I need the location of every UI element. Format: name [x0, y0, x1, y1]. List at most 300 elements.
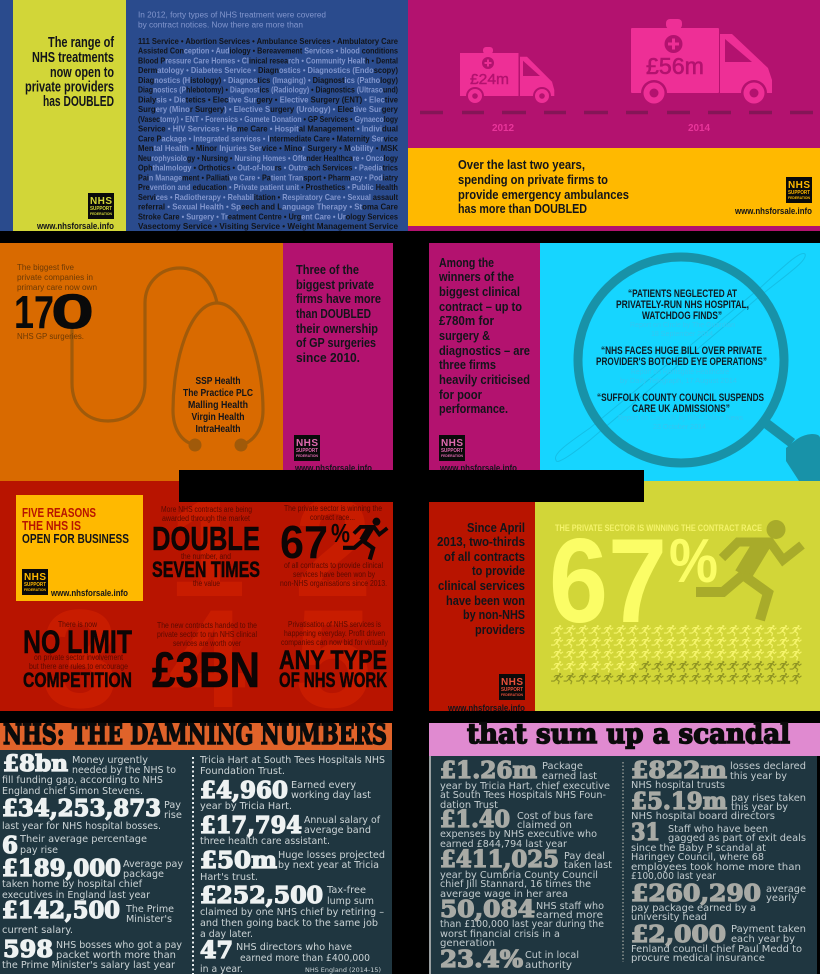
- stat: 47: 47: [200, 937, 233, 964]
- stat: 411,025: £411,025: [440, 846, 559, 873]
- headline: patients neglected: [616, 288, 749, 338]
- heading: treatments doubled: now open to: [50, 65, 114, 81]
- headline: botched eye operations: “NHS FACES HUGE BILL OVER PRIVATE: [601, 345, 762, 357]
- cell: any type: [279, 620, 388, 692]
- logo: NHS: [296, 438, 318, 449]
- panel: the damning numbers: [0, 718, 392, 974]
- intro text: by contract notices. Now there are more than: [138, 20, 303, 30]
- stat: 411,025: chief Jill Stannard, 16 times the: [440, 879, 591, 890]
- stat: 1.26m: at South Tees Hospitals NHS Foun-: [440, 790, 606, 801]
- stat: 5.19m: this year by: [731, 802, 788, 813]
- stat: 6: [2, 832, 147, 859]
- title card: www.nhsforsale.info: [50, 588, 128, 598]
- text: ownership doubled: than DOUBLED: [296, 306, 371, 321]
- stat: 1.40: £1.40: [440, 806, 510, 833]
- list of treatments: Mental Health • Minor Injuries Service • Minor Surgery • Mobility • MSK: [138, 143, 399, 153]
- text: clinical contract winners: winners of the: [438, 269, 514, 284]
- stat: 2,000: Payment taken: [731, 924, 806, 935]
- stat: 2,000: Fenland council chief Paul Medd to: [631, 944, 802, 955]
- text: clinical contract winners: surgery &: [439, 328, 490, 343]
- stat: 170: 17: [14, 286, 54, 338]
- stat: 6: pay rise: [20, 845, 58, 856]
- cell: 67 percent: [280, 504, 387, 588]
- stat: 8bn: Money urgently: [72, 755, 148, 766]
- list of treatments: Prevention and education • Private patient unit • Prosthetics • Public Health: [138, 182, 398, 192]
- list of treatments: Assisted Conception • Audiology • Bereavement Services • blood conditions: [138, 46, 398, 56]
- stat: 142,500: The Prime: [125, 904, 174, 915]
- stat: 822m: losses declared: [730, 761, 806, 772]
- stat: 8bn: fill funding gap, according to NHS: [2, 775, 163, 786]
- title card: FEDERATION: [24, 587, 46, 592]
- headline: care home admissions: “SUFFOLK COUNTY COUNCIL SUSPENDS: [597, 392, 764, 404]
- list of treatments: [138, 36, 399, 231]
- stat: 260,290: average: [766, 884, 806, 895]
- stat: 260,290: [631, 880, 806, 923]
- ghost numerals: 4: [168, 580, 246, 737]
- text: clinical contract winners: £780m for: [439, 313, 494, 328]
- stat: 34,253,873: £34,253,873: [2, 795, 161, 822]
- panel: poor performance: [429, 243, 820, 481]
- cell: double: More NHS contracts are being: [161, 505, 252, 514]
- list: private firms: The Practice PLC: [183, 387, 253, 399]
- label: 2014: 2014: [688, 123, 710, 134]
- logo: FEDERATION: [501, 692, 523, 697]
- stat: 822m: NHS hospital trusts: [631, 780, 725, 791]
- stat: 50,084: than £100,000 last year during the: [440, 919, 604, 930]
- stat: 598: the Prime Minister's salary last year: [2, 960, 175, 971]
- text: ownership doubled: of GP surgeries: [296, 335, 376, 350]
- stat: 411,025: year by Cumbria County Council: [440, 870, 598, 881]
- list of treatments: Pain Management • Palliative Care • Patient Transport • Pharmacy • Podiatry: [138, 172, 398, 182]
- band: spending statement: [408, 148, 820, 226]
- text: clinical contract winners: heavily criticised: [439, 372, 530, 387]
- stat: 598: [2, 936, 182, 971]
- text: biggest five: NHS GP surgeries.: [17, 332, 84, 341]
- logo: FEDERATION: [441, 453, 463, 458]
- text: biggest five: The biggest five: [17, 263, 75, 272]
- stat: 411,025: average wage in her area: [440, 889, 568, 900]
- stat: 252,500: £252,500: [200, 882, 323, 909]
- list of treatments: Care Package • Integrated services • Intermediate Care • Maternity Service: [138, 133, 398, 143]
- stat: 34,253,873: Pay: [164, 800, 181, 811]
- text: two-thirds of contracts: [437, 520, 525, 637]
- heading: treatments doubled: NHS treatments: [32, 50, 114, 66]
- band: spending statement: NHS: [788, 180, 810, 191]
- divider: [622, 762, 624, 962]
- list: private firms: SSP Health: [196, 375, 240, 387]
- ghost numerals: [41, 469, 372, 737]
- black row masks: [0, 231, 820, 723]
- band: spending statement: Over the last two years,: [458, 158, 585, 172]
- text: ownership doubled: their ownership: [296, 321, 378, 336]
- stat: 47: NHS directors who have: [236, 942, 352, 953]
- heading: NHS: THE DAMNING NUMBERS: [3, 718, 387, 751]
- text: ownership doubled: [296, 262, 381, 365]
- cell: double: [152, 505, 260, 588]
- stat: 1.26m: Package: [542, 761, 583, 772]
- list of treatments: Surgery (Minor Surgery) • Elective Surgery (Urology) • Elective Surgery: [138, 104, 398, 114]
- stat: 252,500: [200, 882, 384, 940]
- list of treatments: Diagnostics (Phlebotomy) • Diagnostics (Radiology) • Diagnostics (Ultrasound): [138, 85, 398, 95]
- stat: 4,960: £4,960: [200, 777, 288, 804]
- stat: 822m: [631, 757, 806, 791]
- text: ownership doubled: since 2010.: [296, 350, 360, 365]
- stat: 5.19m: NHS hospital board directors: [631, 811, 775, 822]
- stat: 34,253,873: last year for NHS hospital bosses.: [2, 821, 161, 832]
- band: spending statement: SUPPORT: [788, 190, 810, 196]
- heading: that sum up a scandal: [467, 719, 790, 750]
- stat: 34,253,873: rise: [164, 810, 182, 821]
- logo: NHS: [441, 438, 463, 449]
- stat: 142,500: current salary.: [2, 925, 73, 936]
- text: two-thirds of contracts: providers: [475, 622, 525, 637]
- stat: 411,025: taken last: [564, 860, 612, 871]
- stat: 50m: Hart's trust.: [200, 872, 258, 883]
- list: private firms: IntraHealth: [196, 423, 240, 435]
- stat: 23.4 percent: Cut in local: [525, 950, 579, 961]
- logo: [294, 435, 320, 461]
- stat: 8bn: [2, 751, 176, 797]
- stat: 17,794: average band: [304, 825, 371, 836]
- panel: contract race: [429, 481, 820, 713]
- road: [420, 111, 813, 114]
- stat: 260,290: £260,290: [631, 880, 761, 907]
- logo: NHS: [90, 196, 112, 207]
- caption: contract race: THE PRIVATE SECTOR IS WINNING THE CONTRACT RACE: [555, 523, 762, 534]
- stat: 5.19m: pay rises taken: [731, 793, 806, 804]
- stat: 67 percent: %: [669, 527, 718, 596]
- title card: SUPPORT: [24, 582, 46, 588]
- icon: small ambulance 2012: [460, 47, 554, 105]
- stat: 50,084: generation: [440, 938, 495, 949]
- ghost numerals: 2: [294, 469, 372, 626]
- stat: 189,000: executives in England last year: [2, 890, 150, 901]
- cell: double: the number, and: [181, 552, 231, 561]
- stat: 170: [14, 286, 92, 338]
- website link: www.nhsforsale.info: [36, 221, 114, 231]
- pictogram: 100 runners, 67 highlighted: [551, 625, 802, 685]
- cell: 67 percent: The private sector is winning the: [284, 504, 382, 513]
- band: spending statement: has more than DOUBLED: [458, 202, 587, 216]
- stat: 31: gagged as part of exit deals: [668, 833, 806, 844]
- stat: 2,000: procure medical insurance: [631, 953, 765, 964]
- intro text: [138, 10, 326, 30]
- cell: double: SEVEN TIMES: [152, 557, 260, 582]
- stat: 31: Haringey Council, where 68: [631, 852, 764, 863]
- cell: no limit: NO LIMIT: [23, 624, 132, 660]
- stat: 1.26m: [440, 757, 610, 811]
- list of treatments: 111 Service • Abortion Services • Ambulance Services • Ambulatory Care: [138, 36, 398, 46]
- stat: 23.4 percent: authority: [525, 960, 572, 971]
- cell: no limit: There is now: [58, 620, 97, 629]
- stat: 31: 31: [631, 819, 660, 846]
- logo: FEDERATION: [296, 453, 318, 458]
- stat: 31: £100,000 last year: [631, 871, 716, 882]
- text: clinical contract winners: biggest clinical: [439, 284, 520, 299]
- stat: 2,000: [631, 921, 806, 964]
- text: biggest five: [17, 263, 97, 341]
- stat: 31: employees took home more than: [631, 862, 801, 873]
- stat: 23.4 percent: [440, 946, 579, 973]
- logo: [88, 193, 114, 219]
- title card: NHS: [24, 572, 46, 583]
- list of treatments: Services • Radiotherapy • Rehabilitation • Respiratory Care • Sexual assault: [138, 192, 398, 202]
- source note: NHS England (2014-15): [305, 966, 381, 974]
- stat: 17,794: three health care assistant.: [200, 836, 330, 847]
- headline: patients neglected: “PATIENTS NEGLECTED AT: [628, 288, 737, 300]
- heading: treatments doubled: has DOUBLED: [43, 94, 114, 110]
- headline: patients neglected: PRIVATELY-RUN NHS HOSPITAL,: [616, 299, 749, 311]
- stat: 252,500: a day later.: [200, 929, 253, 940]
- cell: no limit: COMPETITION: [23, 669, 132, 692]
- list of treatments: Stroke Care • Surgery • Treatment Centre • Urgent Care • Urology Services: [138, 211, 398, 221]
- stat: 47: [200, 937, 370, 974]
- icon: large ambulance 2014: £56m: [646, 53, 704, 79]
- stat: 50,084: earned more: [536, 910, 603, 921]
- band: spending statement: spending on private firms to: [458, 173, 608, 187]
- stat: 1.40: [440, 806, 597, 850]
- list: private firms: Virgin Health: [192, 411, 244, 423]
- text: two-thirds of contracts: have been won: [446, 593, 525, 608]
- stat: 252,500: and then going back to the same job: [200, 918, 378, 929]
- stat: 1.26m: dation Trust: [440, 800, 498, 811]
- text: two-thirds of contracts: 2013, two-thirds: [437, 534, 525, 549]
- cell: 3bn: £3BN: [152, 642, 260, 698]
- heading: treatments doubled: [25, 35, 114, 110]
- stat: 260,290: pay package earned by a: [631, 903, 756, 914]
- headline: care home admissions: CARE UK ADMISSIONS”: [632, 403, 730, 415]
- cell: 67 percent: contract race...: [310, 513, 355, 522]
- cell: any type: OF NHS WORK: [279, 669, 387, 692]
- text: two-thirds of contracts: Since April: [467, 520, 525, 535]
- website link: www.nhsforsale.info: [294, 463, 372, 473]
- heading: treatments doubled: private providers: [25, 80, 114, 96]
- text: clinical contract winners: diagnostics – are: [439, 343, 530, 358]
- stat: 1.40: expenses by NHS executive who: [440, 829, 597, 840]
- text: Tricia Hart continuation: [199, 755, 385, 777]
- text: ownership doubled: biggest private: [296, 277, 374, 292]
- list of treatments: Ophthalmology • Orthotics • Out-of-hours • Outreach Services • Paediatrics: [138, 163, 398, 173]
- text: biggest five: primary care now own: [17, 283, 97, 292]
- text: Tricia Hart continuation: Foundation Trust.: [200, 766, 285, 777]
- stat: 189,000: package: [123, 869, 164, 880]
- stat: 8bn: £8bn: [3, 751, 68, 777]
- divider: [192, 757, 194, 974]
- icon: magnifying glass: [578, 257, 820, 481]
- panel: five reasons: [0, 469, 393, 737]
- text: two-thirds of contracts: of all contracts: [444, 549, 525, 564]
- title card: FIVE REASONS: [22, 506, 96, 520]
- cell: no limit: [23, 620, 132, 692]
- cell: 3bn: private sector to run NHS clinical: [157, 630, 257, 639]
- stat: 4,960: working day last: [291, 790, 371, 801]
- logo: NHS: [501, 677, 523, 688]
- cell: any type: happening everyday. Profit driven: [284, 629, 385, 638]
- text: clinical contract winners: [438, 255, 530, 416]
- headline: botched eye operations: by Daily Telegraph, 17 August 2014: [620, 378, 737, 385]
- stat: 142,500: [2, 897, 174, 936]
- stat: 17,794: [200, 812, 381, 847]
- list of treatments: Vasectomy Service • Visiting Service • Weight Management Service: [138, 221, 398, 231]
- cell: 3bn: The new contracts handed to the: [157, 621, 257, 630]
- headline: patients neglected: Report on Circle by The Guardian: [630, 322, 735, 329]
- stat: 822m: this year by: [730, 771, 787, 782]
- stat: 142,500: Minister's: [126, 914, 172, 925]
- ghost numerals: 3: [41, 580, 119, 737]
- headline: botched eye operations: PROVIDER'S BOTCHED EYE OPERATIONS”: [596, 356, 767, 368]
- stat: 1.40: claimed on: [517, 820, 572, 831]
- stat: 6: 6: [2, 832, 18, 859]
- logo: SUPPORT: [296, 448, 318, 454]
- stat: 23.4 percent: 23.4%: [440, 946, 523, 973]
- list of treatments: Diagnostics (Histology) • Diagnostics (Imaging) • Diagnostics (Pathology): [138, 75, 398, 85]
- logo: SUPPORT: [90, 206, 112, 212]
- list: private firms: Malling Health: [188, 399, 248, 411]
- stat: 1.40: earned £844,794 last year: [440, 839, 567, 850]
- stat: 252,500: Tax-free: [326, 885, 366, 896]
- cell: double: awarded through the market: [162, 514, 251, 523]
- cell: no limit: but there are rules to encourage: [29, 662, 128, 671]
- headline: patients neglected: 18 September 2014: [651, 331, 713, 338]
- website link: www.nhsforsale.info: [447, 703, 525, 713]
- stat: 170: 0: [53, 286, 92, 337]
- cell: any type: companies can now bid for virtually: [281, 638, 388, 647]
- cell: 3bn: [152, 621, 260, 698]
- text: two-thirds of contracts: clinical services: [438, 578, 525, 593]
- intro text: In 2012, forty types of NHS treatment were covered: [138, 10, 326, 20]
- text: two-thirds of contracts: by non-NHS: [463, 607, 525, 622]
- text: Tricia Hart continuation: Tricia Hart at South Tees Hospitals NHS: [199, 755, 385, 766]
- stat: 50,084: worst financial crisis in a: [440, 929, 560, 940]
- cell: 3bn: services are worth over: [173, 639, 241, 648]
- ghost numerals: 1: [168, 469, 246, 626]
- cell: 67 percent: 67: [280, 516, 328, 568]
- text: clinical contract winners: three firms: [439, 357, 496, 372]
- title card: [16, 495, 143, 601]
- cell: any type: Privatisation of NHS services is: [288, 620, 381, 629]
- stat: 5.19m: £5.19m: [631, 788, 727, 815]
- panel: GP surgeries: [0, 243, 393, 481]
- list of treatments: referral • Sexual Health • Speech and Language Therapy • Stoma Care: [138, 202, 398, 212]
- headline: care home admissions: [597, 392, 764, 431]
- panel: sum up a scandal: [429, 719, 820, 974]
- logo: FEDERATION: [90, 211, 112, 216]
- list of treatments: Neurophysiology • Nursing • Nursing Homes • Offender Healthcare • Oncology: [138, 153, 398, 163]
- text: clinical contract winners: Among the: [439, 255, 494, 270]
- stat: 17,794: Annual salary of: [304, 815, 381, 826]
- list: private firms: [183, 375, 253, 435]
- stat: 34,253,873: [2, 795, 182, 832]
- text: ownership doubled: firms have more: [296, 291, 381, 306]
- stat: 6: Their average percentage: [19, 834, 147, 845]
- stat: 260,290: yearly: [766, 893, 797, 904]
- stat: 4,960: year by Tricia Hart.: [200, 801, 292, 812]
- headline: patients neglected: WATCHDOG FINDS”: [642, 310, 722, 322]
- cell: double: the value: [193, 579, 220, 588]
- stat: 31: since the Baby P scandal at: [631, 843, 766, 854]
- stat: 260,290: university head: [631, 912, 707, 923]
- stat: 50,084: 50,084: [440, 896, 535, 923]
- stat: 822m: £822m: [631, 757, 727, 784]
- stat: 189,000: Average pay: [123, 859, 183, 870]
- stat: 598: 598: [3, 936, 53, 963]
- stat: 2,000: each year by: [731, 934, 795, 945]
- stat: 5.19m: [631, 788, 806, 822]
- stat: 50m: by next year at Tricia: [278, 860, 379, 871]
- text: clinical contract winners: performance.: [439, 401, 508, 416]
- title card: THE NHS IS: [22, 519, 81, 533]
- icon: scalpel outline: [555, 253, 805, 461]
- list of treatments: Dermatology • Diabetes Service • Diagnostics • Diagnostics (Endoscopy): [138, 65, 398, 75]
- panel: ambulance spending: [408, 0, 820, 231]
- stat: 189,000: [2, 855, 183, 901]
- headline: botched eye operations: [596, 345, 767, 385]
- cell: 67 percent: of all contracts to provide clinical: [284, 561, 383, 570]
- text: two-thirds of contracts: to provide: [472, 563, 525, 578]
- panel: range of NHS treatments: [0, 0, 408, 231]
- logo: SUPPORT: [441, 448, 463, 454]
- text: clinical contract winners: contract – up to: [439, 299, 522, 314]
- band: spending statement: provide emergency ambulances: [458, 188, 629, 202]
- heading: treatments doubled: The range of: [48, 35, 114, 51]
- list of treatments: Dialysis • Dietetics • Elective Surgery • Elective Surgery (ENT) • Elective: [138, 94, 398, 104]
- logo: [499, 674, 525, 700]
- stat: 4,960: [200, 777, 371, 812]
- icon: running figure: [696, 520, 802, 620]
- stat: 189,000: £189,000: [2, 855, 121, 882]
- icon: small ambulance 2012: £24m: [470, 71, 509, 88]
- ghost numerals: 5: [294, 580, 372, 737]
- stat: 189,000: taken home by hospital chief: [2, 879, 143, 890]
- title card: OPEN FOR BUSINESS: [22, 532, 129, 546]
- text: ownership doubled: Three of the: [296, 262, 359, 277]
- stat: 47: earned more than £400,000: [240, 953, 370, 964]
- cell: any type: ANY TYPE: [279, 645, 387, 675]
- headline: care home admissions: 23 October 2014: [653, 424, 706, 431]
- stat: 31: [631, 819, 806, 882]
- stat: 411,025: Pay deal: [564, 851, 605, 862]
- stat: 67 percent: 67: [549, 514, 667, 648]
- headline: botched eye operations: Report on Ramsgate Healthcare: [631, 369, 729, 376]
- stat: 252,500: lump sum: [327, 896, 374, 907]
- stat: 1.26m: year by Tricia Hart, chief executive: [440, 781, 610, 792]
- logo: [439, 435, 465, 461]
- website link: www.nhsforsale.info: [439, 463, 517, 473]
- stat: 1.40: Cost of bus fare: [517, 811, 593, 822]
- headline: care home admissions: Report on Care UK by BBC Online News: [618, 415, 743, 422]
- stat: 252,500: claimed by one NHS chief by retiring –: [200, 907, 384, 918]
- stat: 31: Staff who have been: [668, 824, 768, 835]
- list of treatments: Service • HIV Services • Home Care • Hospital Management • Individual: [138, 124, 398, 134]
- stat: 8bn: England chief Simon Stevens.: [2, 786, 143, 797]
- stat: 2,000: £2,000: [631, 921, 726, 948]
- stat: 50m: [200, 847, 385, 883]
- list of treatments: Blood Pressure Care Homes • Clinical research • Community Health • Dental: [138, 56, 398, 66]
- stat: 411,025: [440, 846, 612, 900]
- text: clinical contract winners: for poor: [439, 387, 482, 402]
- stat: 8bn: needed by the NHS to: [72, 765, 176, 776]
- logo: SUPPORT: [501, 687, 523, 693]
- cell: 67 percent: services have been won by: [293, 570, 375, 579]
- stat: 50,084: NHS staff who: [536, 901, 604, 912]
- stat: 142,500: £142,500: [2, 897, 120, 924]
- stat: 1.26m: earned last: [542, 771, 597, 782]
- stat: 598: NHS bosses who got a pay: [56, 940, 182, 951]
- cell: 67 percent: non-NHS organisations since 2013.: [280, 579, 387, 588]
- stat: 50m: Huge losses projected: [278, 850, 385, 861]
- stat: 50m: £50m: [200, 847, 277, 874]
- text: biggest five: private companies in: [17, 273, 93, 282]
